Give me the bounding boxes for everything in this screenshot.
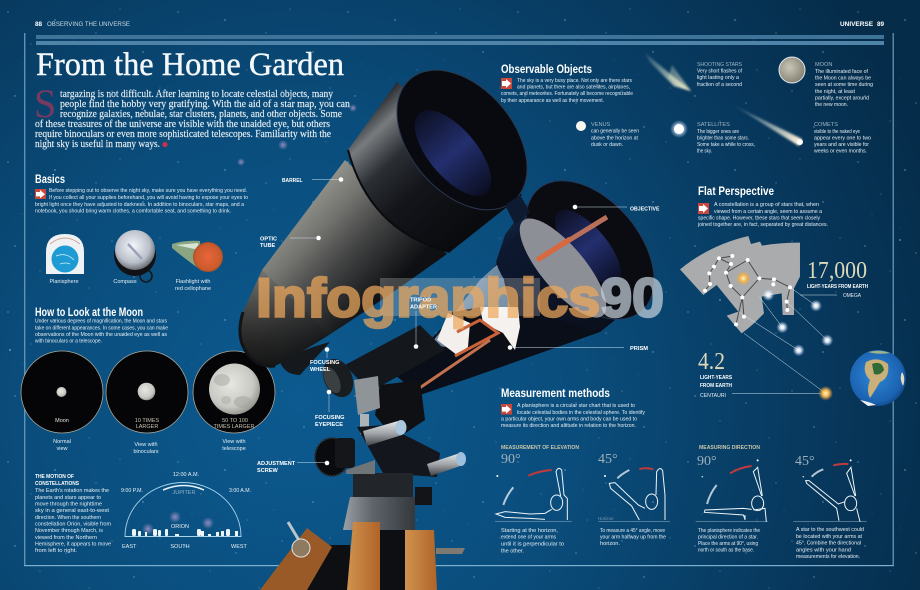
item: moon: partially, except around	[815, 96, 869, 102]
item: satellites: the sky.	[697, 148, 712, 154]
item: venus: above the horizon at	[591, 135, 638, 141]
diagram: sky dome: ORION	[171, 524, 189, 530]
callouts: binocular parts	[257, 177, 660, 474]
callout: adjustment screw	[257, 461, 329, 474]
binoculars: prism cutaway	[377, 307, 520, 417]
callout: barrel	[282, 177, 343, 184]
right page header: UNIVERSE	[840, 21, 874, 28]
caption: flashlight: Flashlight with	[176, 279, 210, 285]
caption: direction 90	[698, 528, 760, 554]
callout: focusing eyepiece: FOCUSING	[315, 415, 345, 421]
callout: focusing eyepiece: EYEPIECE	[315, 422, 343, 428]
text: observable body: and planets, but there are also satellites, airplanes,	[517, 85, 630, 91]
item: satellites: SATELLITES	[697, 122, 730, 128]
left page header: 88	[35, 21, 43, 28]
text: motion of constellations: November through March, is	[35, 528, 103, 534]
text: motion of constellations: sky in a general east-to-west	[35, 508, 109, 514]
intro text block	[34, 81, 351, 150]
figure: elevation 45 degrees	[598, 452, 670, 522]
caption: elevation 45: To measure a 45° angle, move	[600, 528, 665, 534]
focus rod right	[427, 452, 466, 476]
item: comets: COMETS	[814, 122, 838, 128]
item: satellites: brighter than some stars.	[697, 136, 749, 142]
callout: adjustment screw: SCREW	[257, 468, 279, 474]
label: 4.2 light-years: FROM EARTH	[700, 383, 732, 389]
item: moon: seen at some time during	[815, 82, 873, 88]
panel: observable objects	[501, 53, 873, 154]
item: satellites	[670, 120, 755, 154]
diagram: sky dome: SOUTH	[170, 544, 190, 550]
caption: elevation 45	[600, 528, 666, 547]
moon view: binoculars	[106, 351, 188, 455]
text: measurement body: A planisphere is a circular star chart that is used to	[517, 403, 635, 409]
binoculars: tripod mount	[260, 325, 466, 590]
intro text block: night sky is useful in many ways.	[35, 139, 160, 150]
moon view: telescope: View with	[222, 439, 246, 445]
icon: compass	[114, 230, 156, 282]
callout: adjustment screw: ADJUSTMENT	[257, 461, 296, 467]
side bolt	[436, 548, 465, 554]
item: comets	[733, 105, 871, 154]
wing nut	[288, 522, 310, 557]
text: flat perspective body	[697, 202, 828, 228]
caption: direction 45: angles with your hand	[796, 547, 851, 553]
panel: motion of constellations	[35, 472, 251, 554]
item: venus: dusk or dawn.	[591, 142, 623, 148]
callout: tripod adapter: ADAPTER	[410, 304, 437, 310]
label: 4.2 light-years	[698, 349, 820, 399]
text: measurement body: a particular object, your own arms and body can be used to	[501, 416, 637, 422]
item: shooting stars: Very short flashes of	[697, 68, 742, 74]
text: basics body	[35, 188, 248, 214]
heading: flat perspective: Flat Perspective	[698, 186, 774, 198]
right page header: 89	[877, 21, 885, 28]
label: 17,000 light-years: OMEGA	[843, 293, 861, 299]
figure: direction 45 degrees	[793, 454, 867, 522]
callout: focusing wheel: WHEEL	[310, 367, 331, 373]
caption: flashlight: red cellophane	[175, 286, 211, 292]
callout: optic tube	[260, 236, 321, 249]
item: shooting stars	[645, 53, 742, 91]
item: shooting stars: SHOOTING STARS	[697, 62, 742, 68]
diagram: sky dome	[121, 472, 251, 550]
item: venus: VENUS	[591, 122, 611, 128]
icon: red arrow	[698, 203, 709, 214]
icon: red arrow	[501, 404, 512, 414]
panel: measurement methods	[495, 388, 867, 560]
figure: direction 45 degrees: 45°	[795, 454, 815, 469]
binoculars: front barrel	[240, 45, 553, 375]
icon: flashlight with red cellophane	[172, 241, 223, 272]
text: motion of constellations: viewed from the Northern	[35, 535, 97, 541]
item: comets: appear every one to two	[814, 136, 871, 142]
figure: elevation 45 degrees: Horizon	[598, 516, 614, 521]
text: motion of constellations: planets and stars appear to	[35, 495, 101, 501]
diagram: sky dome: WEST	[231, 544, 248, 550]
text: observable body: by their appearance as well as their movement.	[501, 98, 604, 104]
caption: direction 45: be located with your arms at	[796, 534, 862, 540]
item: venus	[576, 121, 639, 148]
moon view: normal: Normal	[53, 439, 71, 445]
panel: how to look at the moon	[21, 307, 275, 455]
text: flat perspective body: viewed from a certain angle, seem to assume a	[714, 209, 823, 215]
heading: basics: Basics	[35, 174, 65, 186]
left page header: OBSERVING THE UNIVERSE	[47, 21, 130, 28]
item: shooting stars: light lasting only a	[697, 75, 740, 81]
earth globe	[850, 350, 906, 406]
text: flat perspective body: specific shape. However, these stars that seem closely	[698, 216, 820, 222]
moon view: binoculars: binoculars	[133, 449, 159, 455]
callout: optic tube: TUBE	[260, 243, 275, 249]
caption: elevation 90: the other.	[501, 548, 524, 554]
text: moon body: with binoculars or a telescope.	[34, 338, 102, 344]
moon view: telescope: 50 TO 100	[222, 418, 248, 424]
caption: elevation 90	[501, 528, 564, 554]
label: 4.2 light-years: 4.2	[698, 349, 725, 375]
text: flat perspective body: joined together are, in fact, separated by great distances.	[697, 222, 828, 228]
callout: barrel: BARREL	[282, 178, 303, 184]
text: motion of constellations: constellation Orion, visible from	[35, 522, 111, 528]
item: shooting stars: fraction of a second	[697, 82, 742, 88]
callout: focusing eyepiece	[315, 390, 345, 428]
text: basics body: If you collect all your supplies beforehand, you will avoid having to expose your eyes to	[49, 195, 248, 201]
text: basics body: bright light once they have adjusted to darkness. In addition to binoculars, star maps, and a	[35, 202, 245, 208]
heading: moon: How to Look at the Moon	[35, 307, 143, 319]
moon view: normal	[21, 351, 103, 452]
figure: direction 90 degrees: 90°	[697, 454, 717, 469]
caption: direction 45	[796, 527, 864, 560]
figure: direction 90 degrees	[696, 454, 768, 522]
caption: direction 90: The planisphere indicates the	[698, 528, 760, 534]
text: measurement body	[501, 403, 645, 429]
callout: prism: PRISM	[630, 346, 648, 352]
label: 4.2 light-years: LIGHT-YEARS	[700, 375, 732, 381]
text: basics body: Before stepping out to observe the night sky, make sure you have everything you need.	[49, 188, 247, 194]
watermark: Infographics 90	[256, 266, 664, 328]
focus rod left	[363, 420, 406, 446]
item: satellites: The bigger ones are	[697, 129, 739, 135]
bracket	[354, 376, 425, 440]
caption: elevation 45: horizon.	[600, 541, 620, 547]
tripod leg: centre	[347, 522, 380, 590]
item: moon: the Moon can always be	[815, 76, 871, 82]
diagram: sky dome: 9:00 P.M.	[121, 488, 143, 494]
text: motion of constellations: CONSTELLATIONS	[35, 481, 79, 487]
caption: direction 90: north or south as the base.	[698, 548, 754, 554]
figure: elevation 90 degrees	[495, 452, 572, 522]
tripod leg: right	[405, 530, 437, 590]
icon: red arrow	[501, 78, 512, 89]
moon view: telescope: TIMES LARGER	[214, 424, 255, 430]
text: observable body: The sky is a very busy place. Not only are there stars	[517, 78, 632, 84]
diagram: sky dome: JUPITER	[173, 490, 195, 496]
callout: prism	[508, 345, 648, 352]
text: observable body	[501, 78, 633, 104]
text: motion of constellations: THE MOTION OF	[35, 474, 75, 480]
caption: direction 45: A star to the southwest could	[796, 527, 864, 533]
diagram: sky dome: EAST	[122, 544, 137, 550]
heading: measurement methods: Measurement methods	[501, 388, 610, 400]
text: moon body	[34, 318, 168, 344]
icon: red arrow	[35, 189, 46, 199]
moon view: normal: view	[56, 446, 68, 452]
item: comets: weeks or even months.	[813, 148, 867, 154]
item: moon: The illuminated face of	[815, 69, 868, 75]
diagram: constellation map	[680, 236, 833, 401]
text: motion of constellations: move through the nighttime	[35, 502, 102, 508]
caption: compass: Compass	[113, 279, 137, 285]
callout: focusing wheel	[310, 347, 340, 373]
icon: planisphere	[46, 234, 84, 274]
callout: objective: OBJECTIVE	[630, 206, 660, 212]
caption: elevation 90: until it is perpendicular to	[501, 542, 564, 548]
caption: planisphere: Planisphere	[49, 279, 79, 285]
caption: direction 45: 45°. Combine the directional	[796, 541, 861, 547]
caption: elevation 45: your arm halfway up from the	[600, 534, 666, 540]
text: moon body: take on different appearances. In some cases, you can make	[35, 326, 168, 332]
caption: direction 90: principal direction of a star.	[698, 534, 758, 540]
item: comets: years and are visible for	[814, 142, 869, 148]
text: measurement body: measure its direction and altitude in relation to the horizon.	[501, 423, 636, 429]
mount column	[307, 460, 432, 590]
heading: observable objects: Observable Objects	[501, 64, 592, 76]
moon view: normal: Moon	[55, 418, 69, 424]
callout: optic tube: OPTIC	[260, 236, 277, 242]
intro text block: require binoculars or even more sophisticated telescopes. Familiarity with the	[35, 129, 331, 140]
label: 17,000 light-years: 17,000	[807, 258, 867, 284]
binoculars: rear barrel	[395, 157, 680, 395]
figure: elevation 45 degrees: 45°	[598, 452, 618, 467]
diagram: sky dome: 3:00 A.M.	[229, 488, 251, 494]
text: moon body: observations of the Moon with the unaided eye as well as	[35, 332, 167, 338]
callout: focusing wheel: FOCUSING	[310, 360, 340, 366]
text: motion of constellations: from left to right.	[35, 548, 77, 554]
intro text block: S	[34, 81, 56, 126]
label: 17,000 light-years: LIGHT-YEARS FROM EARTH	[807, 284, 868, 290]
item: moon	[779, 57, 873, 108]
mount body	[357, 425, 440, 477]
text: motion of constellations: direction. When the southern	[35, 515, 101, 521]
intro text block: of these treasures of the universe are visible with the unaided eye, but others	[35, 119, 330, 130]
label: 17,000 light-years	[800, 258, 868, 299]
caption: direction 45: measurements for elevation.	[796, 554, 860, 560]
panel: flat perspective	[680, 186, 906, 406]
moon view: telescope	[193, 351, 275, 452]
intro text block: people find the hobby very gratifying. With the aid of a star map, you can	[60, 99, 351, 110]
item: moon: the night, at least	[815, 89, 855, 95]
text: moon body: Under various degrees of magnification, the Moon and stars	[35, 318, 167, 324]
text: motion of constellations	[35, 474, 111, 554]
adjustment knob	[315, 438, 355, 476]
item: satellites: Some take a while to cross,	[697, 142, 755, 148]
item: moon: MOON	[815, 62, 832, 68]
eyepiece tube	[317, 325, 445, 402]
callout: objective	[573, 205, 660, 212]
title: From the Home Garden	[36, 47, 344, 83]
intro text block: recognize galaxies, nebulae, star clusters, planets, and other objects. Some	[60, 109, 342, 120]
callout: tripod adapter: TRIPOD	[410, 298, 431, 304]
text: basics body: notebook, you should bring warm clothes, a comfortable seat, and something to drink.	[35, 208, 231, 214]
diagram: sky dome: 12:00 A.M.	[173, 472, 200, 478]
subheading: measurement of elevation: MEASUREMENT OF ELEVATION	[501, 445, 579, 451]
caption: flashlight	[175, 279, 211, 292]
text: motion of constellations: The Earth's rotation makes the	[35, 488, 109, 494]
moon view: binoculars: LARGER	[136, 424, 158, 430]
text: flat perspective body: A constellation is a group of stars that, when	[714, 202, 819, 208]
caption: direction 90: Place the arms at 90°, using	[698, 541, 758, 547]
tripod leg: left	[260, 528, 332, 590]
moon view: binoculars: View with	[134, 442, 158, 448]
subheading: measuring direction: MEASURING DIRECTION	[699, 445, 760, 451]
panel: basics	[35, 174, 248, 292]
item: comets: visible to the naked eye	[814, 129, 860, 135]
text: measurement body: locate celestial bodies in the celestial sphere. To identify	[517, 410, 645, 416]
figure: elevation 90 degrees: 90°	[501, 452, 521, 467]
intro text block: targazing is not difficult. After learning to locate celestial objects, many	[60, 89, 334, 100]
moon view: binoculars: 10 TIMES	[135, 418, 160, 424]
text: motion of constellations: Hemisphere, it appears to move	[35, 542, 111, 548]
moon view: telescope: telescope	[222, 446, 246, 452]
item: moon: the new moon.	[815, 102, 848, 108]
text: observable body: comets, and meteorites. Fortunately all become recognizable	[501, 91, 633, 97]
label: 4.2 light-years: CENTAURI	[700, 393, 726, 399]
callout: tripod adapter	[410, 298, 437, 349]
caption: elevation 90: extend one of your arms	[501, 534, 556, 540]
item: venus: can generally be seen	[591, 129, 639, 135]
caption: elevation 90: Starting at the horizon,	[501, 528, 558, 534]
